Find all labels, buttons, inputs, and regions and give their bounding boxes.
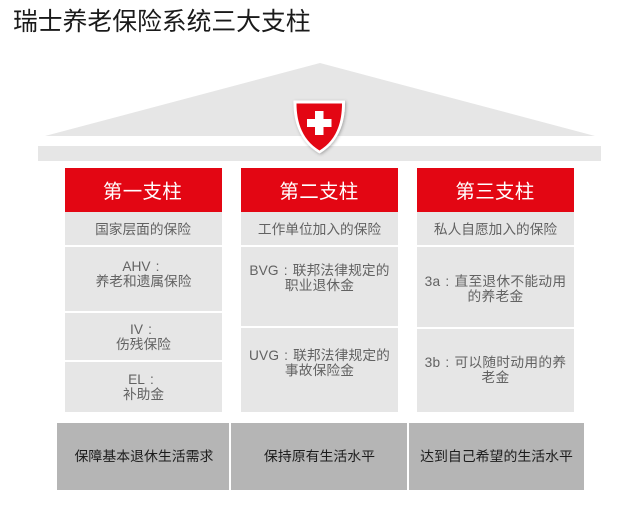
3a cell: : (445, 274, 450, 289)
pillar 2 type (241, 212, 398, 245)
panel: first pillar (65, 168, 222, 412)
goal: maintain standard (231, 423, 407, 490)
BVG cell: BVG 联邦法律规定的 (249, 263, 390, 278)
AHV cell: : (156, 259, 159, 274)
roof beam (38, 146, 601, 161)
3b cell (417, 329, 574, 412)
goal: basic needs: 保障基本退休生活需求 (75, 448, 213, 464)
EL cell: 补助金 (123, 387, 164, 402)
IV cell: 伤残保险 (116, 337, 171, 352)
IV cell (65, 313, 222, 360)
pillar 1 type (65, 212, 222, 245)
panel: second pillar (241, 168, 398, 412)
UVG cell: 事故保险金 (285, 363, 354, 378)
UVG cell: : (284, 348, 288, 363)
BVG cell: 职业退休金 (285, 278, 354, 293)
pillar 1 type: 国家层面的保险 (95, 222, 191, 237)
pillar 3 heading (417, 168, 574, 212)
EL cell: : (150, 372, 154, 387)
BVG cell (241, 247, 398, 326)
goal: desired standard (409, 423, 584, 490)
AHV cell (65, 247, 222, 311)
3b cell: 老金 (482, 370, 509, 385)
goal: maintain standard: 保持原有生活水平 (264, 448, 375, 464)
panel: third pillar (417, 168, 574, 412)
pillar 3 heading: 第三支柱 (455, 181, 535, 203)
icon: swiss shield (292, 100, 348, 156)
goal: desired standard: 达到自己希望的生活水平 (420, 448, 573, 464)
pillar 3 type: 私人自愿加入的保险 (434, 222, 557, 237)
IV cell: IV (130, 322, 143, 337)
pillar 2 heading (241, 168, 398, 212)
AHV cell: AHV (122, 259, 151, 274)
title: 瑞士养老保险系统三大支柱 (13, 9, 311, 36)
BVG cell: : (284, 263, 288, 278)
3a cell: 的养老金 (468, 289, 523, 304)
3a cell (417, 247, 574, 327)
UVG cell (241, 328, 398, 412)
pillar 2 heading: 第二支柱 (279, 181, 359, 203)
AHV cell: 养老和遗属保险 (96, 274, 191, 289)
UVG cell: UVG 联邦法律规定的 (249, 348, 390, 363)
EL cell (65, 362, 222, 412)
3a cell: 3a 直至退休不能动用 (425, 274, 566, 289)
pillar 3 type (417, 212, 574, 245)
pillar 2 type: 工作单位加入的保险 (258, 222, 381, 237)
goal: basic needs (57, 423, 229, 490)
IV cell: : (148, 322, 152, 337)
pillar 1 heading: 第一支柱 (103, 181, 182, 203)
3b cell: : (445, 355, 450, 370)
3b cell: 3b 可以随时动用的养 (425, 355, 566, 370)
roof pediment (46, 63, 594, 136)
EL cell: EL (128, 372, 145, 387)
pillar 1 heading (65, 168, 222, 212)
